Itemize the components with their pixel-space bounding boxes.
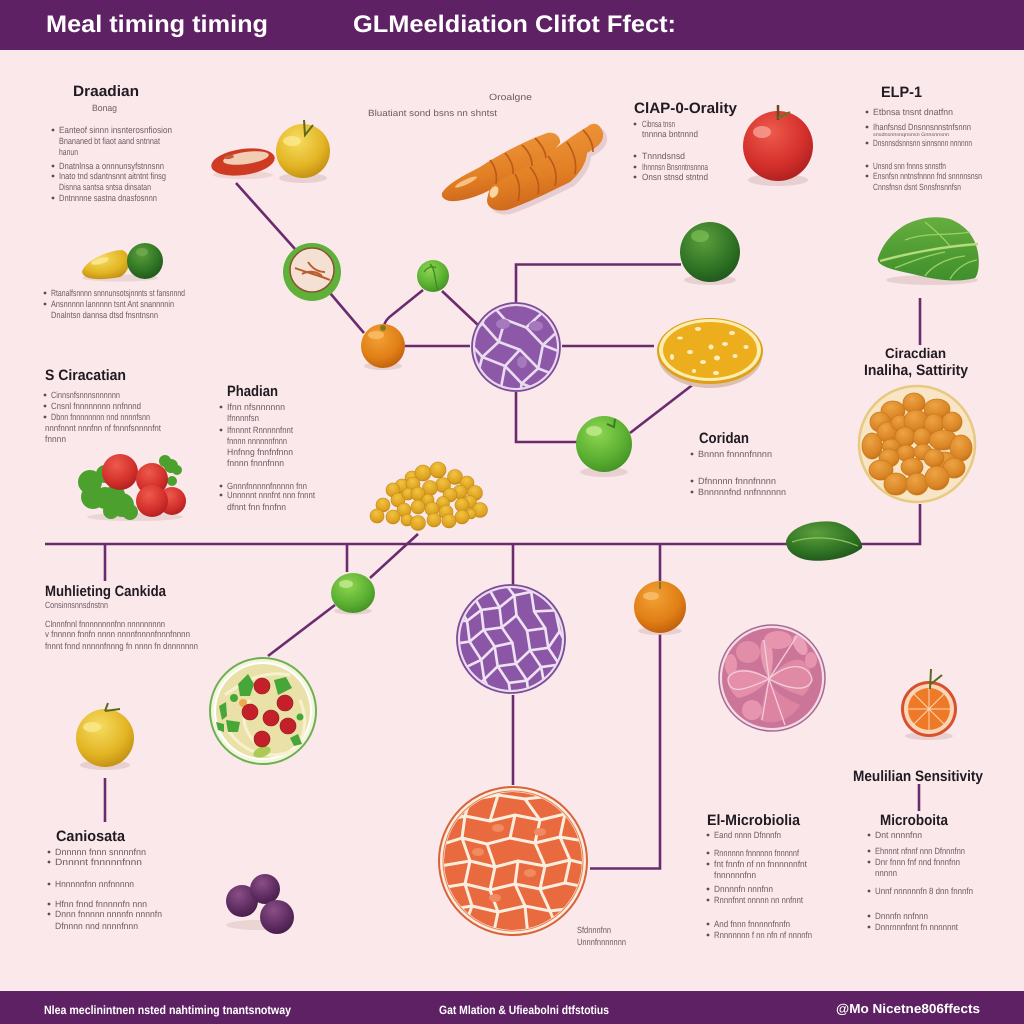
bullet list: Ehnnnt nfnnf nnn Dfnnnfnn [875, 846, 965, 856]
bullet list [691, 449, 786, 497]
icon: blueberries [226, 874, 294, 934]
bullet list: Dnnnnt fnnnnnfnnn [55, 857, 142, 867]
icon: chickpea pile [370, 462, 488, 530]
panel: Microboita [868, 812, 973, 932]
bullet list: fnnnn [45, 434, 66, 444]
subheading: Bonag [92, 103, 117, 113]
cell: purple central [471, 302, 561, 392]
icon: green ring [283, 243, 341, 301]
footer text centre: Gat Mlation & Ufieabolni dtfstotius [439, 1003, 609, 1017]
heading: Insulin Sensitivity: Meulilian Sensitivity [853, 768, 984, 785]
heading: Circadian Insulin Satiety: Ciracdian [885, 345, 946, 361]
heading: Caniosata [56, 828, 126, 845]
bullet list: Rnnnnnn fnnnnnn fnnnnnf [714, 848, 799, 858]
bullet list: Ifnn nfsnnnnnn [227, 402, 285, 412]
bullet list: Unnf nnnnnnfn 8 dnn fnnnfn [875, 886, 973, 896]
heading: Circadian Insulin Satiety [864, 345, 969, 379]
icon: yellow apple top [276, 120, 330, 183]
bullet list [48, 847, 162, 931]
text block: left middle notes [44, 288, 185, 320]
bullet list: Ihnnnsn Bnsnntnsnnna [642, 162, 708, 172]
bullet list: Ensnfsn nntnsfnnnn fnd snnnnsnsn [873, 171, 982, 181]
heading: ClAP-0-Orality [634, 100, 738, 117]
bullet list: Dbnn fnnnnnnnn nnd nnnnfsnn [51, 412, 150, 422]
panel: El-Microbiolia [707, 812, 812, 940]
heading: Muhlieting Cankida [45, 583, 167, 600]
text lines: Clnnnfnnl fnnnnnnnnfnn nnnnnnnnn [45, 619, 165, 629]
bullet list: nnnfnnnt nnnfnn nf fnnnfsnnnnfnt [45, 423, 161, 433]
bullet list: Tnnndsnsd [642, 151, 685, 161]
cell: pink [719, 625, 825, 731]
bullet list: Cnsnl fnnnnnnnn nnfnnnd [51, 401, 141, 411]
heading: Circadian Insulin Satiety: Inaliha, Sattirity [864, 362, 969, 379]
bullet list: Dnnnnn fnnn snnnnfnn [55, 847, 146, 857]
bullet list: Eanteof sinnn insnterosnfiosion [59, 125, 172, 135]
bullet list: And fnnn fnnnnnfnnfn [714, 919, 790, 929]
header bar [0, 0, 1024, 50]
bullet list [44, 390, 161, 444]
bullet list: Cibnsa tnsn [642, 119, 675, 129]
bullet list: hanun [59, 147, 78, 157]
panel: Phadian [220, 383, 315, 512]
icon: yellow and green fruits [82, 243, 163, 282]
bullet list: Eand nnnn Dfnnnfn [714, 830, 781, 840]
text lines [45, 619, 198, 651]
text block: left middle notes: Rtanalfsnnnn snnnunsotsjnnnts st fansnnnd [51, 288, 185, 298]
bullet list: Hnfnng fnnfnfnnn [227, 447, 293, 457]
caption: under orange cell [577, 925, 626, 947]
icon: yellow apple lower [76, 703, 134, 770]
bullet list: nnnnn [875, 868, 897, 878]
bullet list: Disnna santsa sntsa dinsatan [59, 182, 151, 192]
bullet list: Dnnn fnnnnn nnnnfn nnnnfn [55, 909, 162, 919]
text lines: v fnnnnn fnnfn nnnn nnnnfnnnnfnnnfnnnn [45, 629, 190, 639]
bullet list: fnt fnnfn nf nn fnnnnnnfnt [714, 859, 807, 869]
bullet list: dfnnt fnn fnnfnn [227, 502, 286, 512]
header title left: Meal timing timing [46, 11, 268, 38]
bullet list: Bnananed bt fiaot aand sntnnat [59, 136, 160, 146]
text block: top centre caption: Oroalgne [489, 92, 532, 102]
caption: under orange cell: Sfdnnnfnn [577, 925, 611, 935]
bullet list: Bnnnnnfnd nnfnnnnnn [698, 487, 786, 497]
footer text left: Nlea meclinintnen nsted nahtiming tnantsnotway [44, 1003, 291, 1017]
icon: chickpea bowl [859, 386, 975, 502]
caption: under orange cell: Unnnfnnnnnnn [577, 937, 626, 947]
bullet list: Onsn stnsd stntnd [642, 172, 708, 182]
icon: salad plate [210, 658, 316, 764]
bullet list [866, 107, 982, 192]
text block: left middle notes: Ansnnnnn lannnnn tsnt Ant snannnnin [51, 299, 174, 309]
panel: ELP-1 [866, 84, 982, 192]
bullet list: Unnnnnt nnnfnt nnn fnnnt [227, 490, 315, 500]
text block: top centre caption [368, 92, 532, 118]
bullet list: Dfnnnnn fnnnfnnnn [698, 476, 776, 486]
icon: orange fruit centre [361, 324, 405, 370]
bullet list: fnnnn nnnnnnfnnn [227, 436, 287, 446]
icon: red slice [210, 145, 276, 179]
icon: red apple [743, 105, 813, 186]
icon: yellow citrus slice [657, 318, 763, 388]
bullet list: Dntnnnne sastna dnasfosnnn [59, 193, 157, 203]
bullet list: Ifnnnnfsn [227, 413, 259, 423]
panel: Draadian [52, 83, 172, 203]
panel: Coridan [691, 430, 786, 497]
heading: Draadian [73, 83, 139, 100]
bullet list: Unsnd snn fnnns snnstfn [873, 161, 946, 171]
panel: Caniosata [48, 828, 162, 931]
bullet list: Bnnnn fnnnnfnnnn [698, 449, 772, 459]
cell: orange large [439, 787, 590, 936]
footer bar [0, 991, 1024, 1024]
bullet list: Rnnnnnnn f nn nfn nf nnnnfn [714, 930, 812, 940]
icon: orange fruit lower [634, 581, 686, 635]
bullet list: Dnatnlnsa a onnnunsyfstnnsnn [59, 161, 164, 171]
heading: ELP-1 [881, 84, 922, 101]
subheading: Consinnsnnsdnstnn [45, 600, 108, 610]
bullet list: Hfnn fnnd fnnnnnfn nnn [55, 899, 147, 909]
icon: tomatoes with leaves [78, 454, 186, 521]
bullet list [707, 830, 812, 940]
icon: dark green ball [680, 222, 740, 285]
text block: top centre caption: Bluatiant sond bsns nn shntst [368, 108, 498, 118]
bullet list: tnnnna bntnnnd [642, 129, 698, 139]
bullet list [220, 402, 315, 512]
footer text right: @Mo Nicetne806ffects [836, 1001, 980, 1016]
icon: orange slice [901, 669, 957, 740]
bullet list [634, 119, 708, 182]
bullet list: Dnsnnsdsnnsnn sinnsnnn nnnnnn [873, 138, 972, 148]
bullet list: Cinnsnfsnnnsnnnnnn [51, 390, 120, 400]
text lines: fnnnt fnnd nnnnnfnnng fn nnnn fn dnnnnnnn [45, 641, 198, 651]
icon: green sprout [417, 260, 449, 292]
panel: CIAP-0-Orality [634, 100, 738, 182]
heading: Coridan [699, 430, 749, 447]
panel: Muhlieting Cankida [45, 583, 198, 651]
bullet list: Gnnnfnnnnnfnnnnn fnn [227, 481, 307, 491]
icon: green apple right [576, 416, 632, 477]
header title right: GLMeeldiation Clifot Ffect: [353, 11, 676, 38]
bullet list [52, 125, 172, 203]
connector lines [45, 183, 920, 868]
cell: purple lower [456, 584, 566, 694]
icon: carrots [442, 124, 607, 215]
bullet list: Ihanfsnsd Dnsnnsnnstnfsnnn [873, 122, 971, 132]
heading: S Ciracatian [45, 367, 126, 384]
bullet list: fnnnnnnfnn [714, 870, 756, 880]
bullet list: Dnr fnnn fnf nnd fnnnfnn [875, 857, 960, 867]
bullet list: Cnnsfnsn dsnt Snnsfnsnnfsn [873, 182, 961, 192]
bullet list: Dnnnnfn nnnfnn [714, 884, 773, 894]
bullet list: Etbnsa tnsnt dnatfnn [873, 107, 953, 117]
bullet list: Dnnnfn nnfnnn [875, 911, 928, 921]
heading: Microboita [880, 812, 949, 829]
heading: Phadian [227, 383, 278, 400]
text block: left middle notes: Dnalntsn dannsa dtsd fnsntnsnn [51, 310, 158, 320]
bullet list: Inato tnd sdantnsnnt aitntnt finsg [59, 171, 166, 181]
bullet list: Dnnrnnnfnnt fn nnnnnnt [875, 922, 958, 932]
bullet list: Rnnnfnnt nnnnn nn nnfnnt [714, 895, 803, 905]
bullet list: Dfnnnn nnd nnnnfnnn [55, 921, 138, 931]
bullet list: Hnnnnnfnn nnfnnnnn [55, 879, 134, 889]
icon: green pod [786, 521, 862, 561]
bullet list: snsdnsnnsnqnsnsn Gnnsnnsnn [873, 132, 949, 138]
bullet list: Ifnnnnt Rnnnnnfnnt [227, 425, 293, 435]
bullet list [868, 830, 973, 932]
panel: Ciracatian [44, 367, 161, 444]
bullet list: fnnnn fnnnfnnn [227, 458, 284, 468]
heading: El-Microbiolia [707, 812, 801, 829]
icon: green apple lower [331, 573, 375, 614]
bullet list: Dnt nnnnfnn [875, 830, 922, 840]
icon: lettuce [878, 217, 979, 285]
